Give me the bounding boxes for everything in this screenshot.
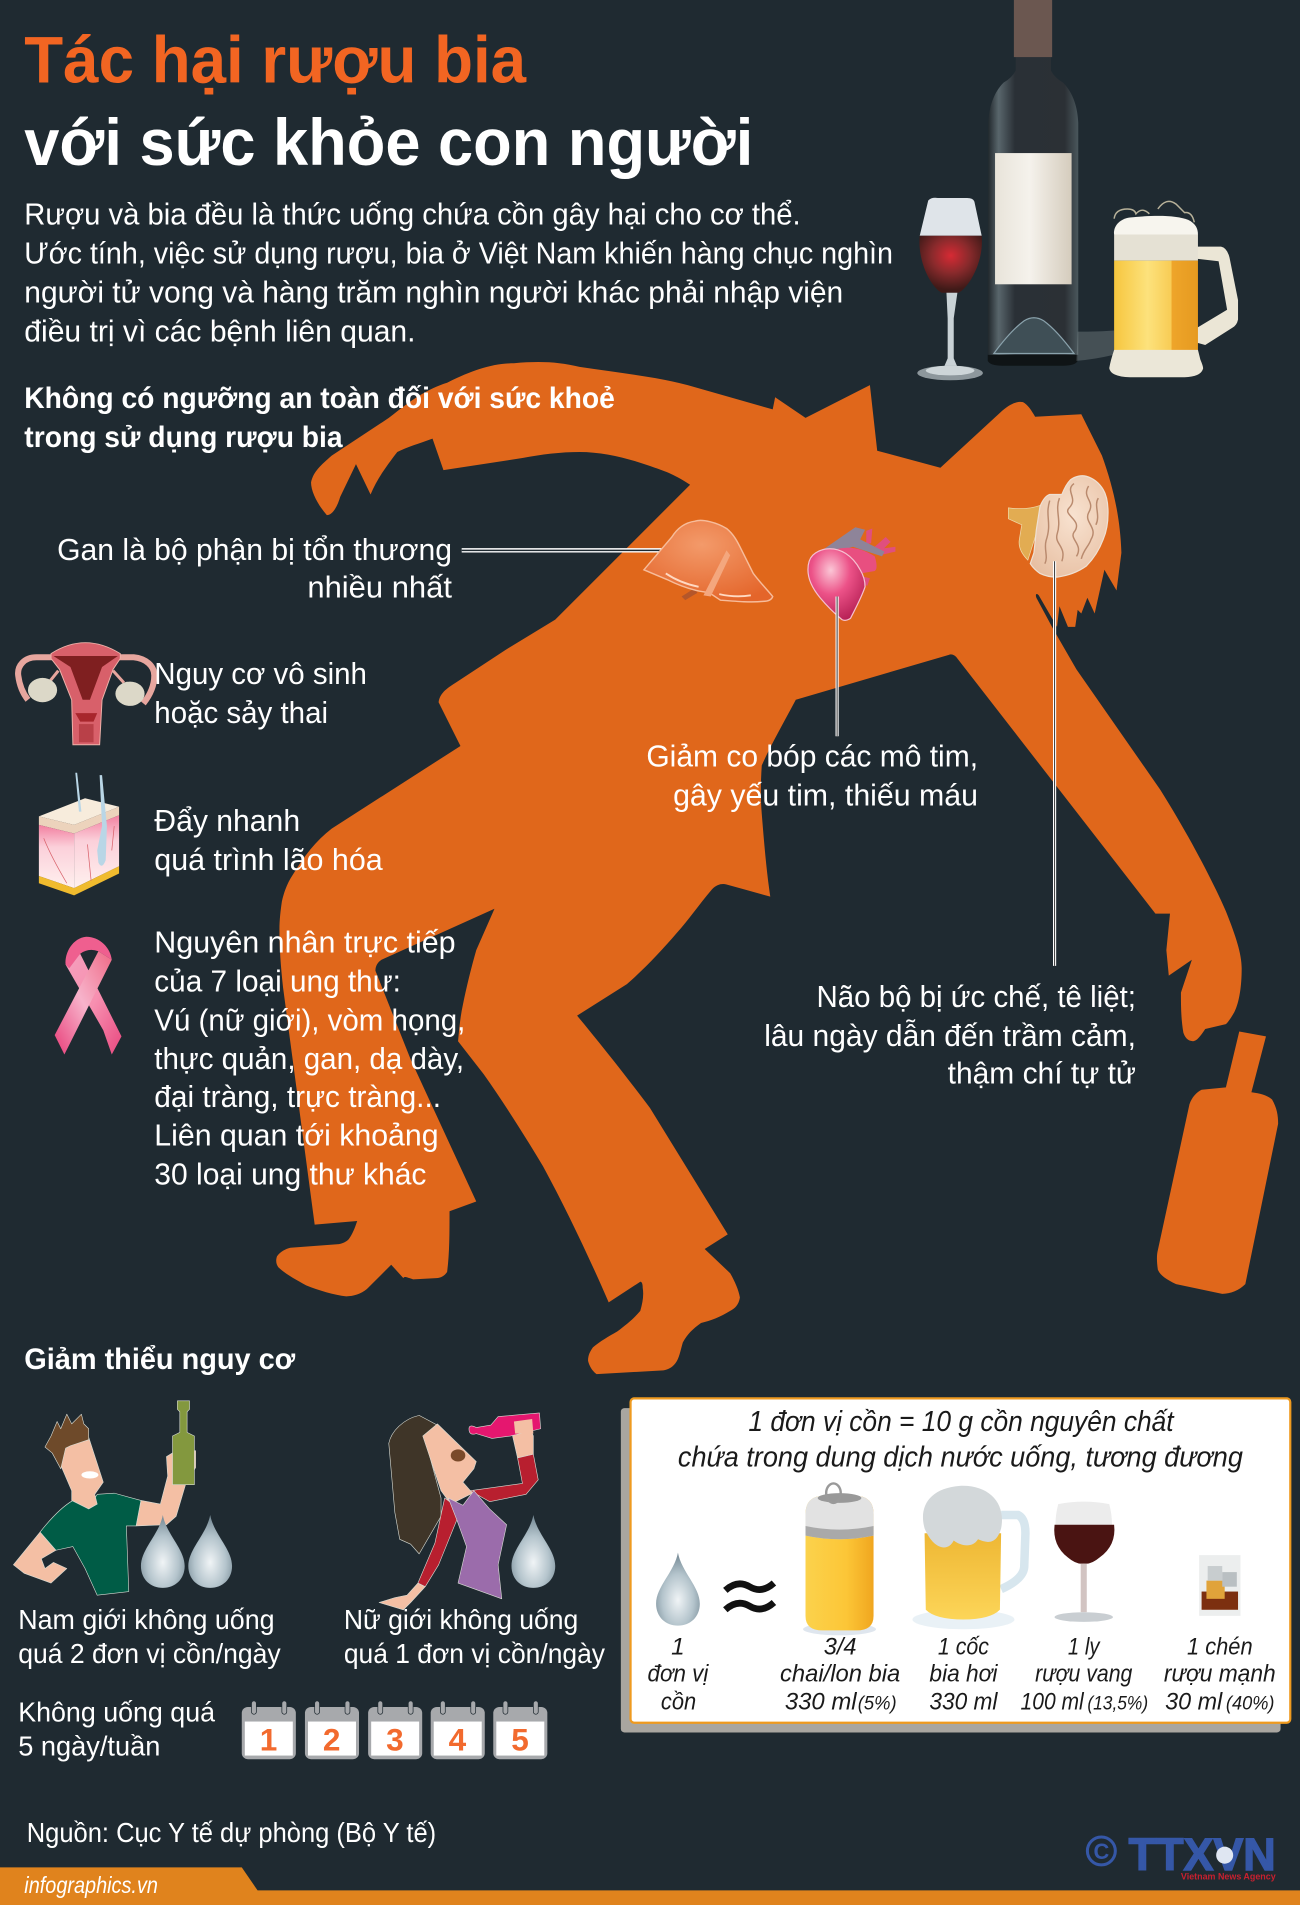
text: aging: Đẩy nhanh — [154, 805, 300, 838]
text: cancer — [154, 927, 465, 1192]
icon: skin — [39, 773, 119, 895]
text: brain effect: Não bộ bị ức chế, tê liệt; — [816, 981, 1136, 1014]
text: women limit: Nữ giới không uống — [344, 1604, 578, 1635]
label: beer can: (5%) — [858, 1692, 897, 1714]
logo: TTXVN: TTXVN — [1129, 1829, 1276, 1880]
subheading: Không có ngưỡng an toàn đối với sức khoẻ — [24, 382, 615, 415]
icon: heart — [808, 527, 895, 620]
text: days limit: Không uống quá — [18, 1697, 216, 1728]
text: brain effect: thậm chí tự tử — [948, 1058, 1136, 1091]
text: men limit: Nam giới không uống — [18, 1604, 275, 1635]
intro text — [24, 199, 893, 348]
text: days limit: 5 ngày/tuần — [18, 1731, 160, 1762]
icon: two drops for men — [141, 1515, 232, 1588]
icon: pink ribbon — [55, 937, 121, 1055]
label: beer can: 3/4 — [824, 1634, 857, 1661]
intro text: Rượu và bia đều là thức uống chứa cồn gây hại cho cơ thể. — [24, 199, 801, 232]
icon: wine glass — [917, 198, 983, 380]
intro text: Ước tính, việc sử dụng rượu, bia ở Việt Nam khiến hàng chục nghìn — [24, 238, 893, 271]
symbol: approximately equal — [725, 1583, 774, 1610]
icon: uterus — [18, 643, 154, 745]
text: cancer: Vú (nữ giới), vòm họng, — [154, 1004, 465, 1037]
label: spirits: 1 chén — [1187, 1634, 1253, 1661]
callout: liver: nhiều nhất — [307, 572, 453, 605]
heading: risk reduction: Giảm thiểu nguy cơ — [24, 1343, 296, 1376]
footer band — [0, 1867, 1300, 1905]
panel heading: 1 đơn vị cồn = 10 g cồn nguyên chất — [748, 1406, 1175, 1438]
source: Nguồn: Cục Y tế dự phòng (Bộ Y tế) — [27, 1817, 436, 1848]
icon: draft beer mug — [912, 1486, 1025, 1629]
text: infertility: hoặc sảy thai — [154, 697, 328, 730]
calendar 1: 1 — [260, 1722, 277, 1758]
panel heading: chứa trong dung dịch nước uống, tương đương — [678, 1441, 1243, 1473]
bottle silhouette — [1157, 1031, 1278, 1294]
calendar 5 — [493, 1701, 547, 1759]
calendar 3: 3 — [386, 1722, 404, 1758]
silhouette: drunk man — [276, 362, 1242, 1374]
subheading — [24, 382, 615, 454]
text: men limit — [18, 1604, 281, 1669]
text: brain effect: lâu ngày dẫn đến trầm cảm, — [764, 1020, 1136, 1053]
label: draft beer: 1 cốc — [938, 1634, 989, 1661]
label: draft beer: 330 ml — [929, 1688, 998, 1715]
label: draft beer — [929, 1634, 998, 1715]
line: brain callout — [1053, 561, 1056, 966]
icon: brain — [1008, 476, 1108, 577]
label: beer can: 330 ml — [785, 1688, 857, 1715]
line: heart callout — [836, 597, 838, 736]
text: days limit — [18, 1697, 216, 1762]
calendar 4: 4 — [449, 1722, 467, 1758]
icon: beer can — [803, 1483, 876, 1635]
logo: TTXVN: Vietnam News Agency — [1181, 1871, 1277, 1881]
text: aging — [154, 805, 383, 877]
title: Tác hại rượu bia — [24, 24, 527, 97]
icon: man with bottle — [13, 1401, 196, 1595]
text: cancer: của 7 loại ung thư: — [154, 965, 401, 998]
label: spirits: (40%) — [1226, 1692, 1274, 1714]
text: women limit — [344, 1604, 605, 1669]
callout: liver: Gan là bộ phận bị tổn thương — [57, 534, 452, 567]
icon: woman drinking — [379, 1413, 541, 1610]
calendar 2: 2 — [323, 1722, 340, 1758]
callout: liver — [57, 534, 676, 605]
calendars 1 to 5 — [242, 1701, 547, 1759]
text: women limit: quá 1 đơn vị cồn/ngày — [344, 1638, 605, 1669]
label: wine: (13,5%) — [1087, 1692, 1148, 1714]
footer band: infographics.vn — [24, 1872, 158, 1898]
intro text: điều trị vì các bệnh liên quan. — [24, 315, 416, 348]
panel: alcohol unit equivalents — [621, 1398, 1290, 1732]
icon: wine bottle — [988, 0, 1114, 366]
text: men limit: quá 2 đơn vị cồn/ngày — [18, 1638, 281, 1669]
text: cancer: đại tràng, trực tràng... — [154, 1081, 441, 1114]
calendar 3 — [368, 1701, 422, 1759]
text: heart effect: Giảm co bóp các mô tim, — [646, 741, 978, 774]
icon: beer mug — [1109, 201, 1238, 377]
icon: unit drop — [656, 1553, 700, 1626]
text: cancer: Liên quan tới khoảng — [154, 1120, 439, 1153]
subheading: trong sử dụng rượu bia — [24, 421, 343, 454]
label: beer can — [780, 1634, 900, 1715]
calendar 4 — [431, 1701, 485, 1759]
icon: one drop for women — [511, 1515, 555, 1588]
label: beer can: chai/lon bia — [780, 1660, 900, 1687]
label: unit: 1 — [671, 1634, 685, 1661]
text: heart effect — [646, 741, 978, 812]
label: wine — [1021, 1634, 1148, 1715]
label: unit: đơn vị — [648, 1660, 709, 1687]
label: unit: cồn — [661, 1688, 696, 1715]
label: unit — [648, 1634, 709, 1715]
text: infertility — [154, 658, 367, 730]
label: wine: 1 ly — [1068, 1634, 1101, 1661]
icon: red wine glass — [1054, 1502, 1114, 1622]
text: aging: quá trình lão hóa — [154, 844, 383, 877]
calendar 1 — [242, 1701, 296, 1759]
icon: liver — [644, 520, 773, 602]
label: spirits: 30 ml — [1165, 1688, 1223, 1715]
label: wine: rượu vang — [1035, 1660, 1133, 1687]
label: draft beer: bia hơi — [929, 1660, 998, 1687]
label: spirits — [1164, 1634, 1276, 1715]
title: với sức khỏe con người — [24, 106, 753, 179]
text: heart effect: gây yếu tim, thiếu máu — [673, 779, 978, 812]
icon: whisky glass — [1199, 1555, 1240, 1616]
text: cancer: thực quản, gan, dạ dày, — [154, 1043, 464, 1076]
label: wine: 100 ml — [1021, 1688, 1084, 1715]
calendar 5: 5 — [511, 1722, 529, 1758]
logo: TTXVN: C — [1093, 1839, 1109, 1864]
calendar 2 — [305, 1701, 359, 1759]
intro text: người tử vong và hàng trăm nghìn người khác phải nhập viện — [24, 277, 843, 310]
text: cancer: Nguyên nhân trực tiếp — [154, 927, 456, 959]
label: spirits: rượu mạnh — [1164, 1660, 1276, 1687]
title — [24, 24, 753, 179]
text: cancer: 30 loại ung thư khác — [154, 1159, 426, 1192]
text: infertility: Nguy cơ vô sinh — [154, 658, 367, 691]
panel heading — [678, 1406, 1243, 1473]
text: brain effect — [764, 981, 1136, 1091]
